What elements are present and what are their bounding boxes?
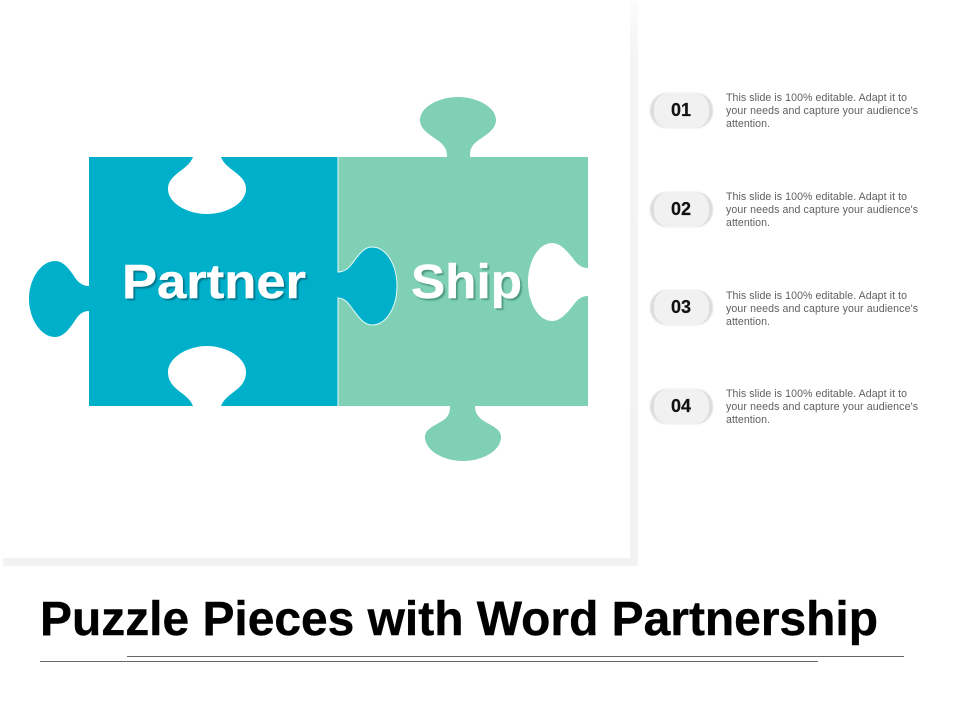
badge 03: 03 bbox=[671, 297, 691, 317]
description 04: your needs and capture your audience's bbox=[726, 401, 918, 413]
list item 03 bbox=[650, 290, 918, 328]
description 02: attention. bbox=[726, 217, 770, 229]
badge 01 bbox=[650, 93, 713, 128]
description 04: attention. bbox=[726, 414, 770, 426]
badge 04 bbox=[650, 389, 713, 424]
description 01: your needs and capture your audience's bbox=[726, 105, 918, 117]
badge 01: 01 bbox=[671, 100, 691, 120]
label: Ship: Ship bbox=[413, 258, 524, 311]
description 02 bbox=[726, 191, 918, 229]
description 01 bbox=[726, 92, 918, 130]
description 01: This slide is 100% editable. Adapt it to bbox=[726, 92, 907, 104]
puzzle piece: Ship bbox=[338, 97, 588, 461]
list item 02 bbox=[650, 191, 918, 229]
badge 04: 04 bbox=[671, 396, 691, 416]
panel: puzzle card bbox=[0, 0, 638, 566]
description 02: This slide is 100% editable. Adapt it to bbox=[726, 191, 907, 203]
description 03: attention. bbox=[726, 316, 770, 328]
list item 01 bbox=[650, 92, 918, 130]
label: Ship: Ship bbox=[411, 256, 522, 309]
badge 02 bbox=[650, 192, 713, 227]
description 03: This slide is 100% editable. Adapt it to bbox=[726, 290, 907, 302]
badge 03 bbox=[650, 290, 713, 325]
list item 04 bbox=[650, 388, 918, 426]
title: Puzzle Pieces with Word Partnership bbox=[40, 593, 878, 646]
description 01: attention. bbox=[726, 118, 770, 130]
description 03 bbox=[726, 290, 918, 328]
description 02: your needs and capture your audience's bbox=[726, 204, 918, 216]
description 04: This slide is 100% editable. Adapt it to bbox=[726, 388, 907, 400]
puzzle piece: Partner bbox=[29, 157, 397, 406]
badge 02: 02 bbox=[671, 199, 691, 219]
description 04 bbox=[726, 388, 918, 426]
label: Partner: Partner bbox=[122, 256, 306, 309]
puzzle graphic bbox=[29, 97, 588, 461]
description 03: your needs and capture your audience's bbox=[726, 303, 918, 315]
label: Partner: Partner bbox=[124, 258, 308, 311]
